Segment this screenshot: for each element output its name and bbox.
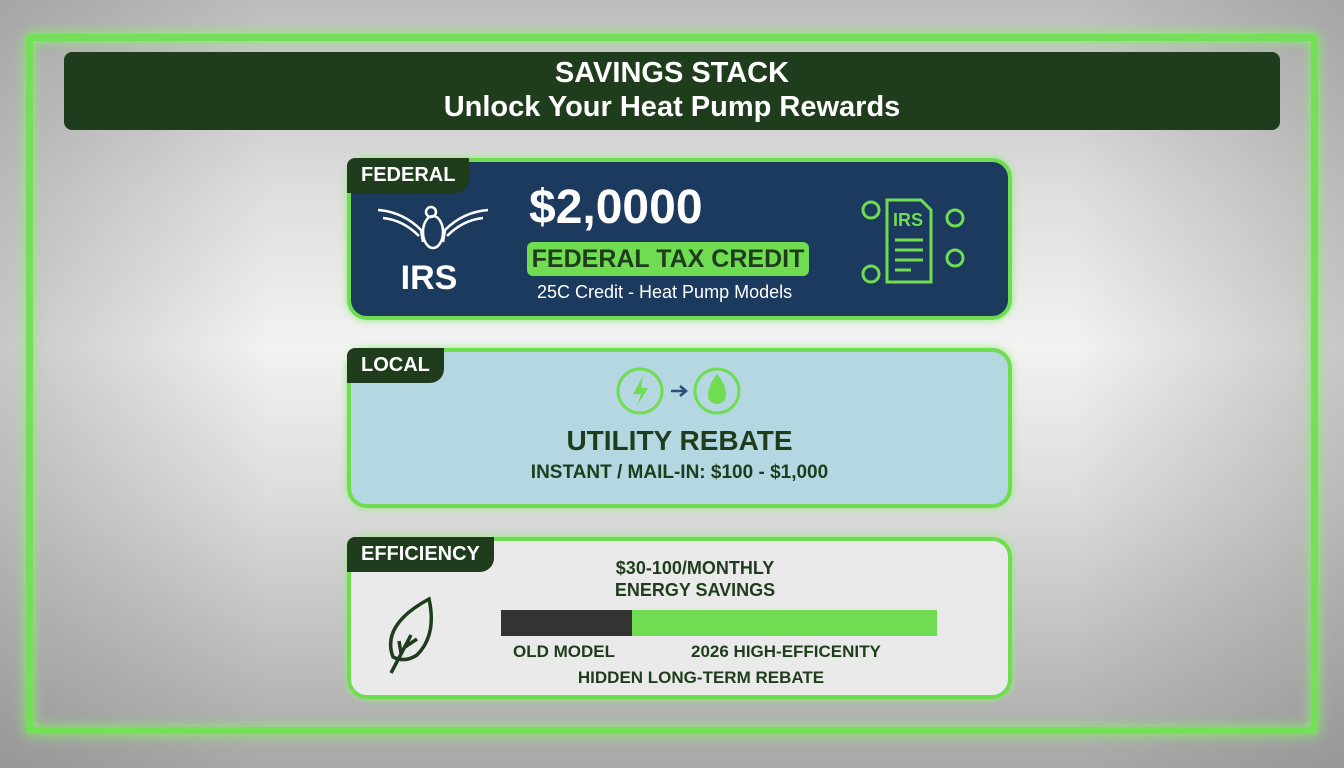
title [64, 52, 1280, 130]
icon: IRS eagle logo [378, 206, 488, 297]
panel: local [347, 348, 1012, 508]
icon: IRS eagle logo: IRS [401, 259, 457, 297]
tag: federal [347, 158, 469, 193]
tag: local [347, 348, 444, 383]
icon: leaf [388, 596, 434, 674]
tag: federal: FEDERAL [361, 164, 455, 186]
tag: efficiency [347, 537, 494, 572]
amount: $2,0000 [529, 181, 703, 234]
heading: utility rebate: UTILITY REBATE [566, 425, 793, 456]
icon: IRS document with coins: IRS [893, 210, 923, 230]
tag: efficiency: EFFICIENCY [361, 543, 480, 565]
panel: federal [347, 158, 1012, 320]
icon: electricity to fire [616, 368, 740, 414]
text: hidden rebate: HIDDEN LONG-TERM REBATE [578, 668, 824, 687]
label: old model: OLD MODEL [513, 642, 615, 661]
badge: federal tax credit: FEDERAL TAX CREDIT [532, 245, 804, 273]
text: monthly savings [615, 558, 775, 600]
bar chart: old vs new [501, 610, 937, 636]
text: rebate range: INSTANT / MAIL-IN: $100 - $1,000 [531, 462, 828, 483]
panel: efficiency [347, 537, 1012, 699]
label: high efficiency: 2026 HIGH-EFFICENITY [691, 642, 881, 661]
title: SAVINGS STACK [555, 57, 789, 89]
icon: IRS document with coins [862, 198, 964, 284]
title: Unlock Your Heat Pump Rewards [444, 91, 900, 123]
text: monthly savings: $30-100/MONTHLY [616, 558, 774, 578]
text: monthly savings: ENERGY SAVINGS [615, 580, 775, 600]
tag: local: LOCAL [361, 354, 430, 376]
subtitle: 25C Credit - Heat Pump Models [537, 282, 792, 302]
